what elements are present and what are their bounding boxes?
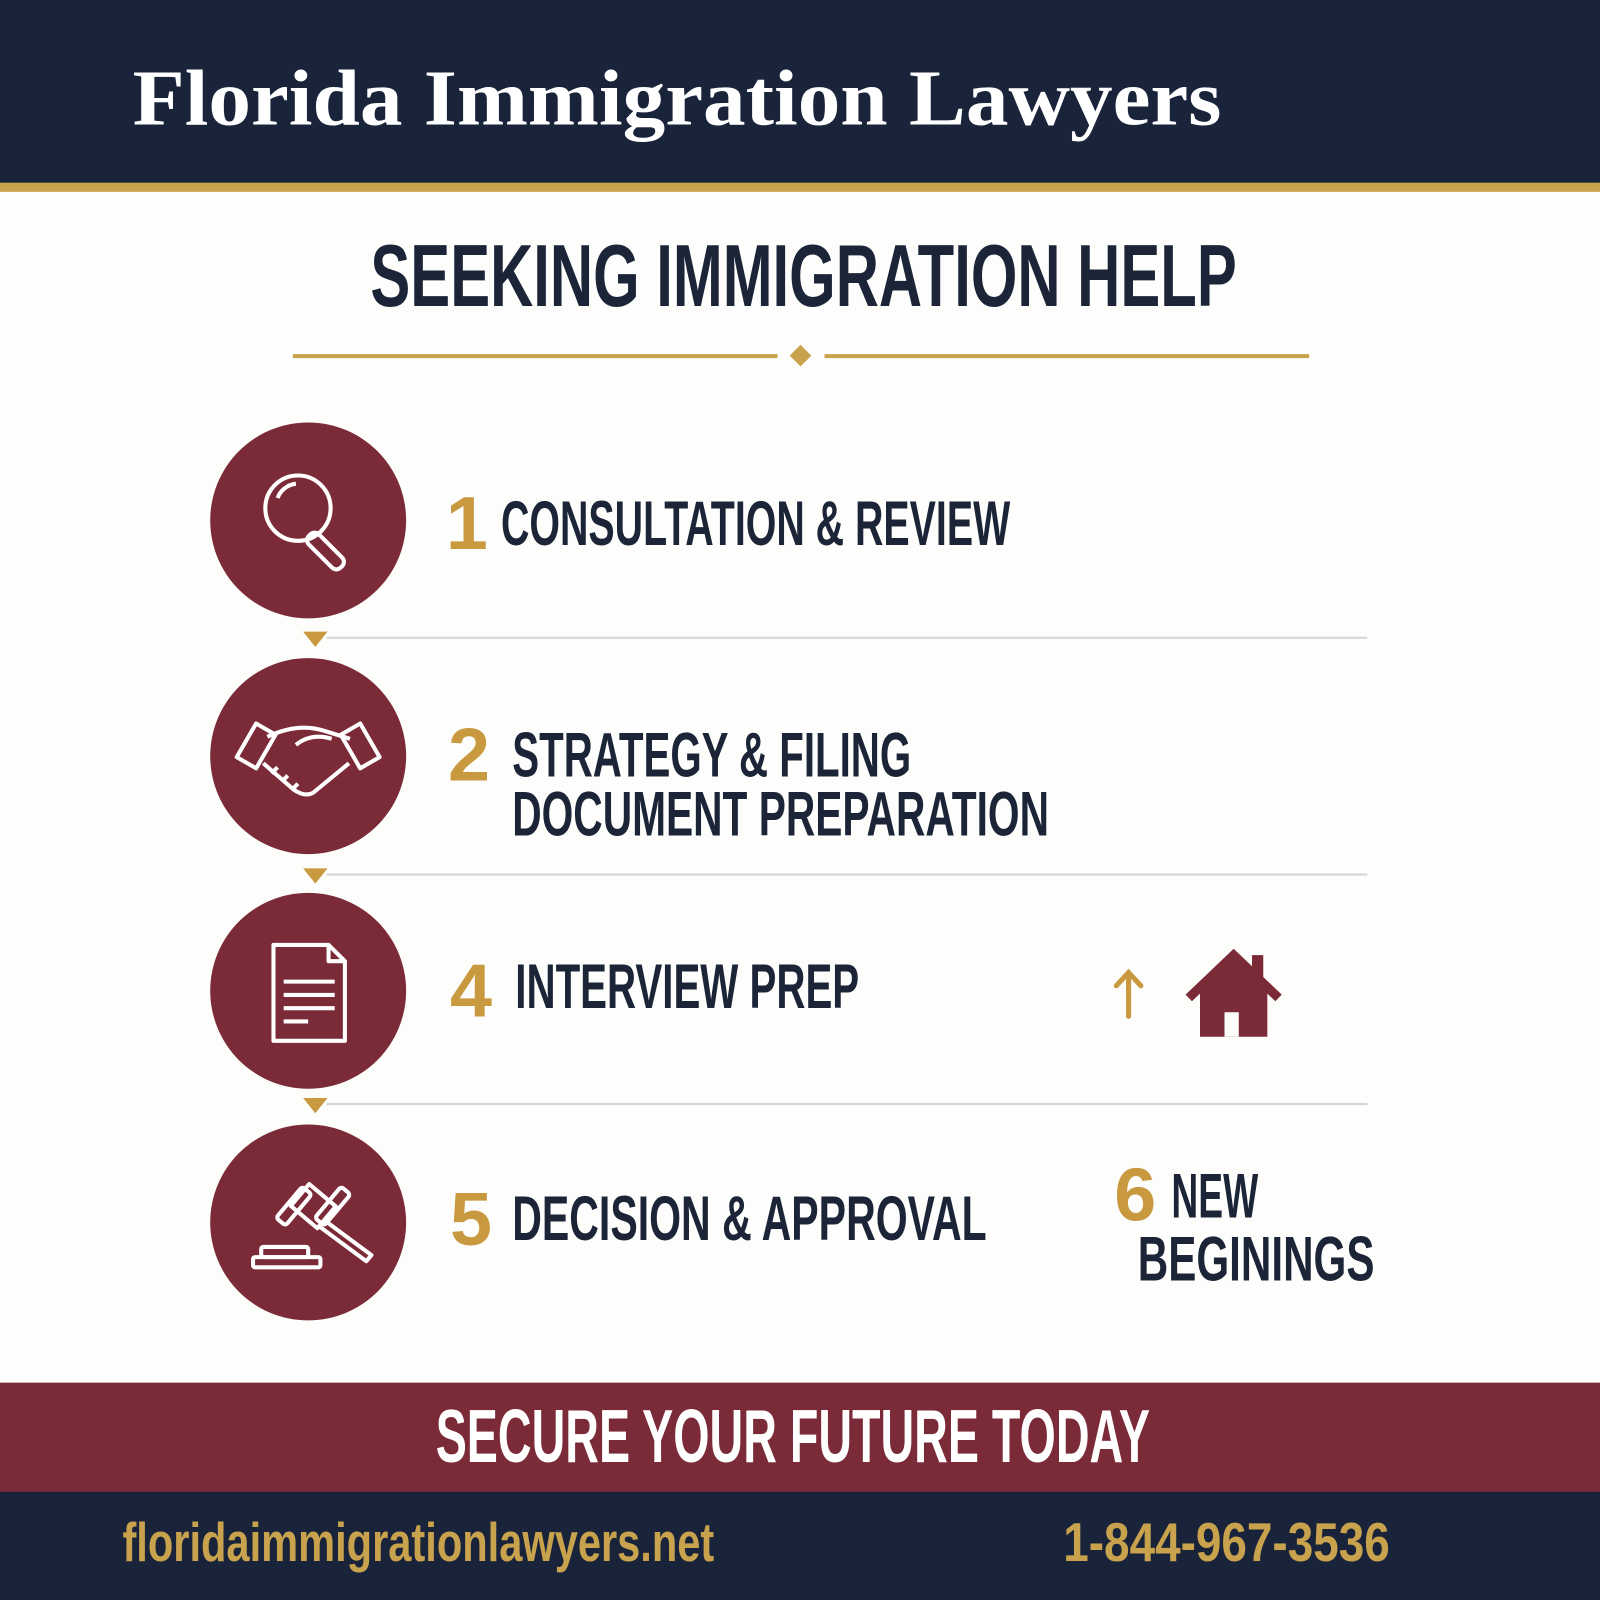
call to action band — [0, 1383, 1600, 1493]
arrows: step connectors — [303, 632, 328, 1113]
step 5 — [450, 1178, 987, 1262]
step 4: INTERVIEW PREP — [515, 952, 859, 1022]
footer contact: floridaimmigrationlawyers.net — [122, 1511, 714, 1573]
step 6: BEGININGS — [1138, 1225, 1374, 1295]
step 6: 6 — [1114, 1153, 1156, 1237]
step 5: DECISION & APPROVAL — [512, 1184, 987, 1254]
step 2: STRATEGY & FILING — [512, 721, 911, 791]
call to action band: SECURE YOUR FUTURE TODAY — [436, 1395, 1150, 1479]
arrow: up — [1116, 972, 1141, 1016]
footer contact: 1-844-967-3536 — [1063, 1511, 1390, 1573]
icon: document circle — [210, 893, 406, 1089]
title: Florida Immigration Lawyers — [133, 54, 1221, 142]
step 2: DOCUMENT PREPARATION — [512, 780, 1049, 850]
step 1: 1 — [446, 482, 488, 566]
step 6: NEW — [1171, 1161, 1258, 1231]
icon: handshake circle — [210, 658, 406, 854]
icon: magnifier circle — [210, 422, 406, 618]
divider with diamond — [293, 345, 1309, 366]
step 5: 5 — [450, 1178, 492, 1262]
header bar — [0, 0, 1600, 192]
separators — [327, 638, 1367, 1104]
step 6 — [1114, 1153, 1374, 1295]
step 4: 4 — [450, 949, 492, 1033]
icon: gavel circle — [210, 1124, 406, 1320]
step 2 — [448, 714, 1049, 850]
step 4 — [450, 949, 859, 1033]
step 1 — [446, 482, 1010, 566]
footer contact — [0, 1492, 1600, 1600]
icon: house — [1189, 955, 1279, 1037]
step 1: CONSULTATION & REVIEW — [501, 489, 1010, 559]
step 2: 2 — [448, 714, 490, 798]
